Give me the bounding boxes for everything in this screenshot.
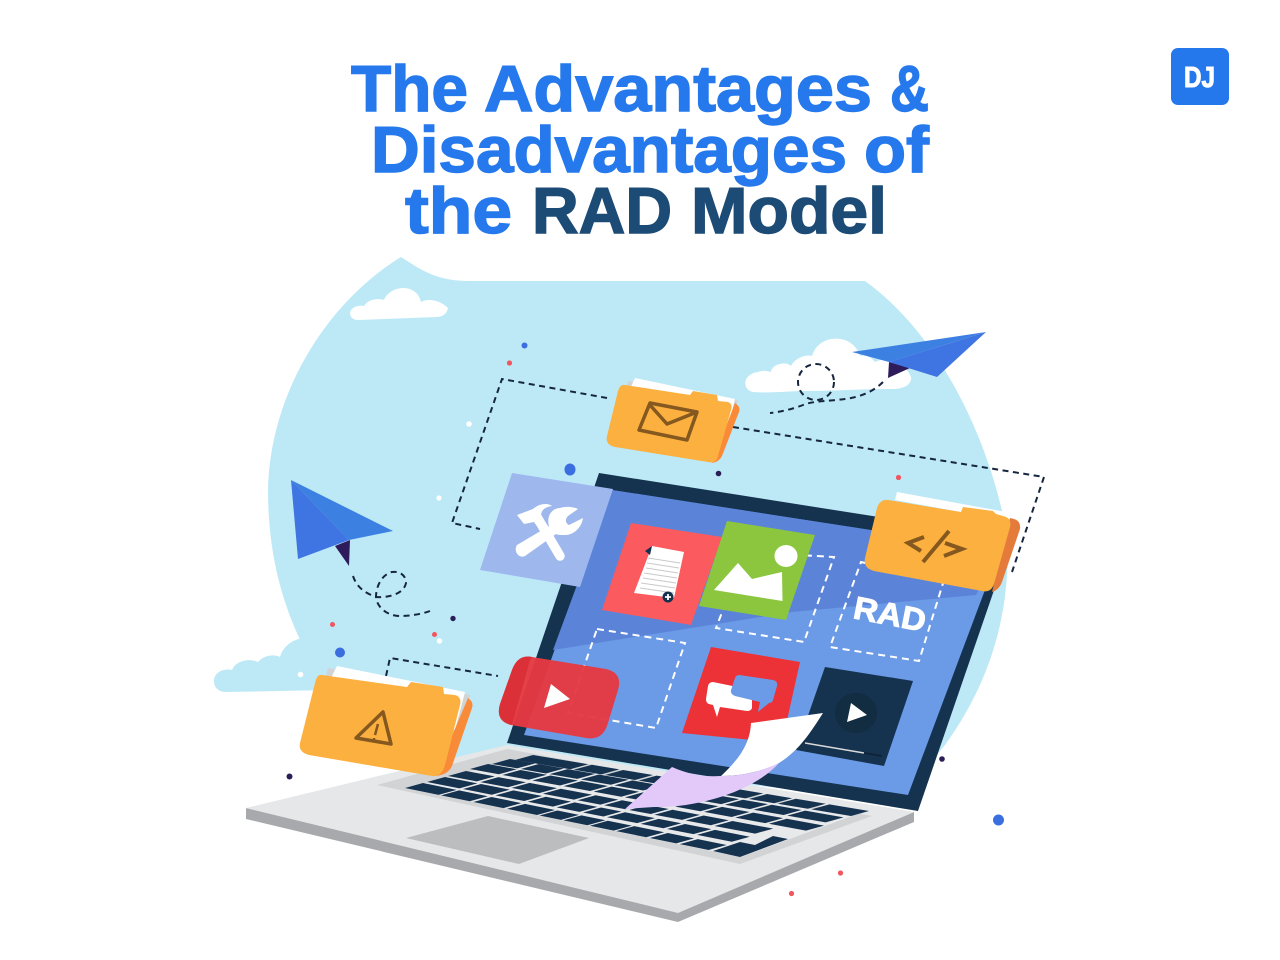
decorative dots — [286, 342, 1004, 896]
curling sheet of paper — [625, 713, 823, 809]
RAD label: RAD — [851, 590, 929, 639]
cloud: top left — [350, 288, 448, 320]
title: RAD — [532, 174, 672, 247]
trackpad — [406, 816, 589, 864]
screen display — [524, 490, 1000, 795]
title: & — [890, 52, 929, 125]
paper plane: right — [852, 332, 986, 378]
keyboard keys — [405, 755, 869, 857]
title: of — [864, 113, 929, 186]
title: Model — [691, 174, 887, 247]
title: Disadvantages — [371, 113, 847, 186]
app tile: tools — [480, 473, 613, 587]
title: the — [405, 174, 512, 247]
laptop — [246, 473, 1012, 922]
app tile: image — [699, 521, 815, 620]
app tile: document — [602, 523, 722, 625]
title — [351, 52, 929, 247]
app tile: chat — [682, 647, 800, 743]
logo: DJ: DJ — [1184, 62, 1215, 94]
logo: DJ — [1171, 48, 1229, 105]
laptop base — [246, 745, 914, 922]
app tile: video — [796, 667, 913, 766]
app tile: play button — [499, 657, 619, 738]
folder: warning — [300, 666, 472, 776]
cloud: top right — [745, 339, 911, 392]
dashed placeholder boxes — [568, 552, 944, 728]
sky background blob — [268, 257, 1008, 800]
dashed connector lines — [353, 364, 1044, 676]
paper plane: left — [291, 480, 393, 566]
folder: code — [865, 492, 1020, 592]
folder: mail — [607, 378, 740, 463]
title: Advantages — [484, 52, 872, 125]
cloud: lower left — [214, 638, 330, 692]
title: The — [351, 52, 468, 125]
screen bezel — [507, 473, 1012, 811]
